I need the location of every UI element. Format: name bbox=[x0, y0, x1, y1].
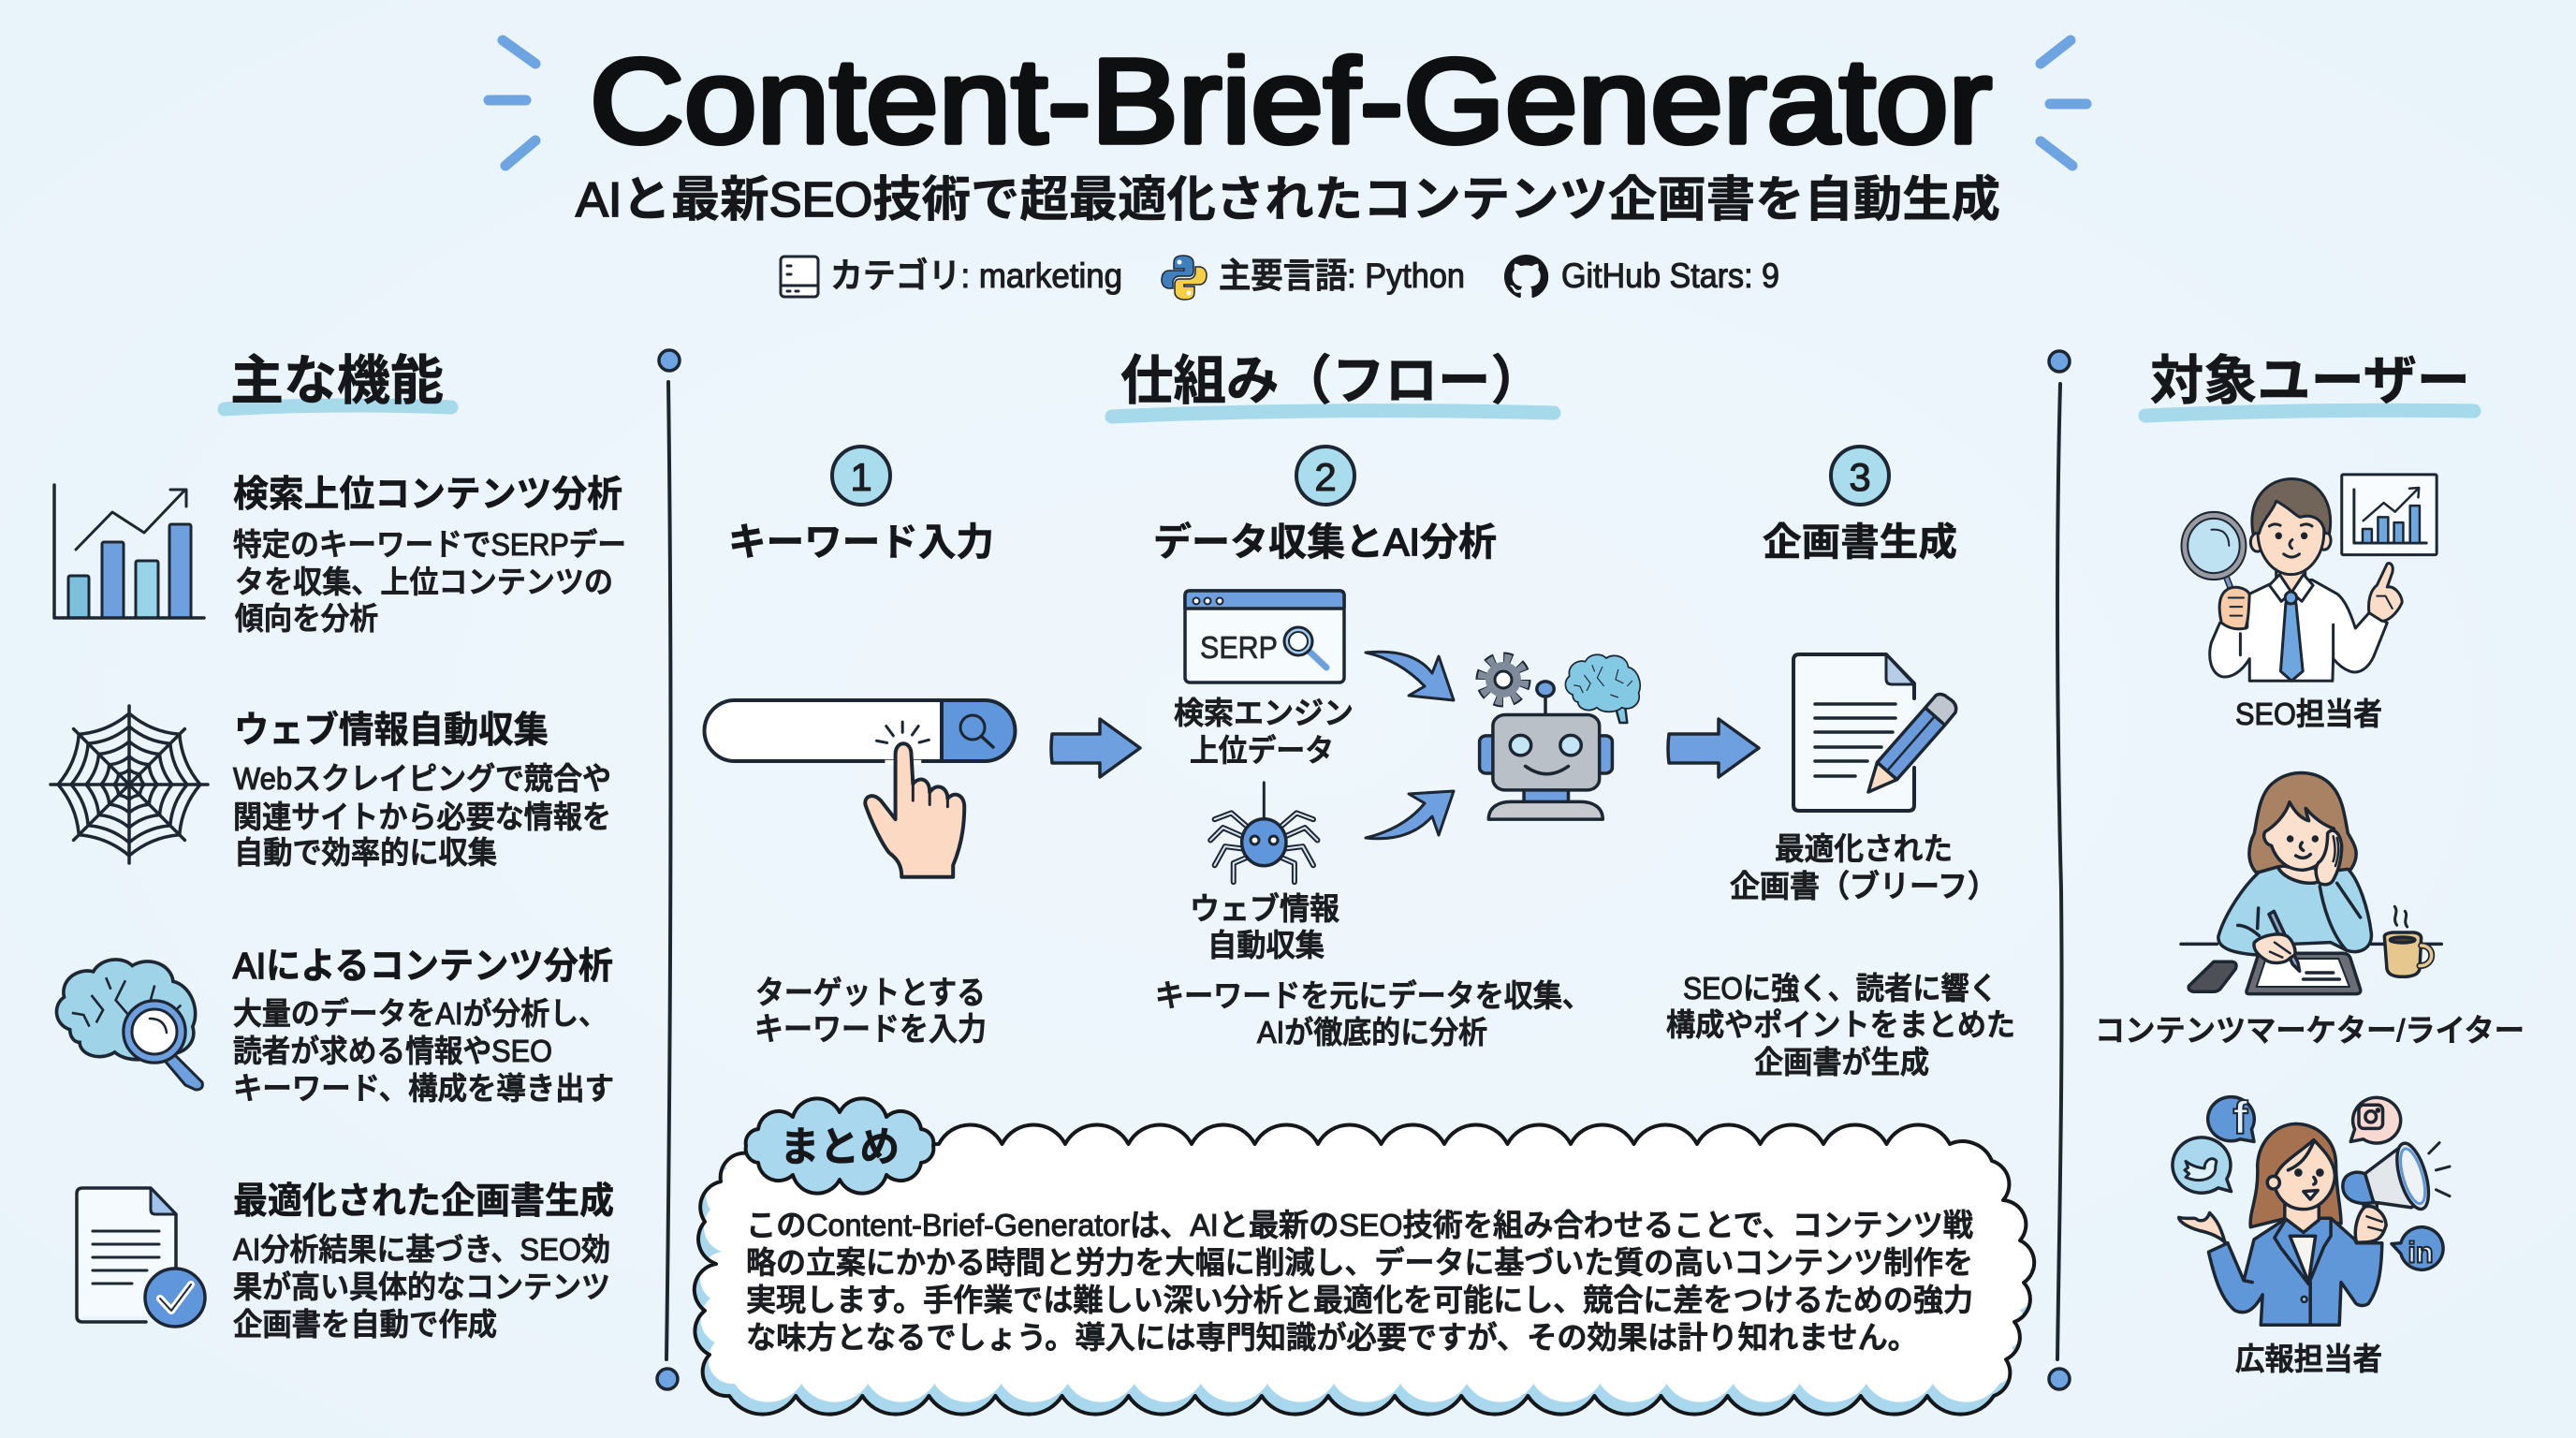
feature text bbox=[233, 527, 626, 636]
step 1 bbox=[704, 447, 1015, 1048]
icon: brain with magnifier bbox=[56, 960, 202, 1090]
step title: キーワード入力 bbox=[728, 521, 994, 564]
feature 4 bbox=[77, 1181, 614, 1342]
feature 1 bbox=[54, 475, 626, 636]
spider label: ウェブ情報 bbox=[1190, 891, 1339, 926]
icon: document with check bbox=[77, 1188, 205, 1327]
illustration: woman with megaphone and social icons bbox=[2173, 1093, 2450, 1325]
SERP label bbox=[1174, 696, 1354, 768]
stars label: GitHub Stars: 9 bbox=[1561, 257, 1779, 295]
step text: キーワードを入力 bbox=[754, 1012, 987, 1048]
user: PR person bbox=[2173, 1093, 2450, 1376]
panel: target users bbox=[2095, 475, 2525, 1376]
decoration: title sparks bbox=[489, 40, 2086, 166]
step number 2 bbox=[1296, 447, 1354, 505]
feature text: 関連サイトから必要な情報を bbox=[233, 800, 611, 834]
heading: features: 主な機能 bbox=[230, 351, 444, 411]
illustration: woman writing on tablet bbox=[2181, 773, 2441, 994]
document label bbox=[1730, 831, 1998, 903]
icon: robot bbox=[1480, 682, 1612, 819]
feature text: タを収集、上位コンテンツの bbox=[235, 565, 613, 599]
icon: document with pencil bbox=[1793, 654, 1956, 811]
feature text: 傾向を分析 bbox=[235, 601, 378, 636]
user: content marketer bbox=[2095, 773, 2525, 1048]
heading underline: users bbox=[2145, 410, 2474, 416]
icon: brain bbox=[1565, 654, 1640, 723]
step number 1 bbox=[832, 447, 890, 505]
summary text: このContent-Brief-Generatorは、AIと最新のSEO技術を組み合わせることで、コンテンツ戦 bbox=[746, 1208, 1973, 1242]
SERP label: 上位データ bbox=[1190, 733, 1334, 768]
heading underline: features bbox=[225, 405, 451, 409]
panel: flow bbox=[704, 447, 2015, 1079]
feature text: キーワード、構成を導き出す bbox=[233, 1071, 614, 1106]
icon: notebook bbox=[781, 257, 818, 297]
step text bbox=[1666, 971, 2015, 1079]
document label: 企画書（ブリーフ） bbox=[1730, 869, 1998, 903]
feature title: ウェブ情報自動収集 bbox=[234, 710, 549, 751]
step text: キーワードを元にデータを収集、 bbox=[1155, 978, 1591, 1013]
heading underline: flow bbox=[1112, 411, 1554, 417]
step 2 bbox=[1153, 447, 1640, 1049]
icon: SERP window bbox=[1185, 591, 1344, 682]
user label: コンテンツマーケター/ライター bbox=[2095, 1013, 2525, 1048]
feature text: 特定のキーワードでSERPデー bbox=[233, 527, 626, 562]
step 3 bbox=[1666, 447, 2015, 1079]
illustration: woman with megaphone and social icons: in bbox=[2408, 1236, 2434, 1269]
summary tag bbox=[746, 1098, 933, 1194]
feature text bbox=[233, 761, 611, 870]
divider: left bbox=[657, 350, 680, 1389]
category label: カテゴリ: marketing bbox=[830, 257, 1122, 295]
step text: SEOに強く、読者に響く bbox=[1683, 971, 1998, 1005]
step number 2: 2 bbox=[1314, 455, 1337, 499]
title: Content-Brief-Generator bbox=[590, 35, 1992, 169]
illustration: man with magnifier and chart bbox=[2182, 475, 2437, 681]
icon: spider bbox=[1210, 783, 1317, 882]
step text: AIが徹底的に分析 bbox=[1257, 1015, 1487, 1049]
SERP label: 検索エンジン bbox=[1174, 696, 1354, 730]
arrow: SERP to robot bbox=[1366, 652, 1454, 700]
summary text bbox=[746, 1208, 1973, 1355]
spider label bbox=[1190, 891, 1339, 962]
step title: データ収集とAI分析 bbox=[1153, 521, 1497, 564]
user label: SEO担当者 bbox=[2235, 697, 2382, 731]
feature text: 企画書を自動で作成 bbox=[233, 1307, 497, 1342]
icon: spider web bbox=[38, 694, 220, 875]
feature text: Webスクレイピングで競合や bbox=[233, 761, 611, 796]
panel: features bbox=[38, 475, 626, 1342]
illustration: woman with megaphone and social icons: f bbox=[2233, 1093, 2248, 1144]
summary cloud bbox=[695, 1112, 2040, 1415]
step number 3 bbox=[1831, 447, 1889, 505]
summary tag text: まとめ bbox=[780, 1124, 900, 1170]
feature text: 大量のデータをAIが分析し、 bbox=[233, 996, 607, 1031]
divider: right bbox=[2049, 351, 2070, 1389]
feature text: 読者が求める情報やSEO bbox=[233, 1034, 552, 1068]
user: SEO person bbox=[2182, 475, 2437, 731]
summary text: 略の立案にかかる時間と労力を大幅に削減し、データに基づいた質の高いコンテンツ制作を bbox=[746, 1245, 1973, 1280]
document label: 最適化された bbox=[1775, 831, 1953, 866]
step text: 構成やポイントをまとめた bbox=[1666, 1007, 2015, 1042]
icon: python bbox=[1162, 256, 1207, 300]
step text bbox=[1155, 978, 1591, 1049]
icon: pointing hand bbox=[865, 722, 964, 877]
feature text: 自動で効率的に収集 bbox=[234, 835, 497, 870]
subtitle: AIと最新SEO技術で超最適化されたコンテンツ企画書を自動生成 bbox=[576, 173, 2000, 227]
step title: 企画書生成 bbox=[1763, 521, 1957, 564]
arrow: step 2 to step 3 bbox=[1668, 719, 1759, 777]
icon: github bbox=[1504, 255, 1548, 298]
icon: search bar bbox=[704, 700, 1015, 761]
summary text: な味方となるでしょう。導入には専門知識が必要ですが、その効果は計り知れません。 bbox=[746, 1320, 1918, 1355]
meta row bbox=[781, 255, 1779, 300]
language label: 主要言語: Python bbox=[1219, 257, 1465, 295]
summary text: 実現します。手作業では難しい深い分析と最適化を可能にし、競合に差をつけるための強力 bbox=[746, 1283, 1973, 1317]
icon: bar chart bbox=[54, 485, 204, 618]
step number 3: 3 bbox=[1849, 455, 1871, 499]
arrow: step 1 to step 2 bbox=[1051, 719, 1140, 777]
feature text: AI分析結果に基づき、SEO効 bbox=[233, 1232, 610, 1267]
feature title: 最適化された企画書生成 bbox=[233, 1181, 614, 1222]
feature text: 果が高い具体的なコンテンツ bbox=[233, 1269, 610, 1304]
icon: gear bbox=[1482, 658, 1525, 701]
feature text bbox=[233, 1232, 610, 1342]
user label: 広報担当者 bbox=[2235, 1342, 2382, 1376]
step text: 企画書が生成 bbox=[1754, 1045, 1929, 1079]
panel: summary callout bbox=[695, 1098, 2040, 1415]
icon: SERP window: SERP bbox=[1200, 630, 1278, 665]
feature 2 bbox=[38, 694, 611, 875]
heading: flow: 仕組み（フロー） bbox=[1120, 351, 1544, 411]
step text: ターゲットとする bbox=[755, 976, 986, 1011]
step text bbox=[754, 976, 987, 1048]
feature 3 bbox=[56, 946, 614, 1106]
spider label: 自動収集 bbox=[1208, 928, 1325, 962]
feature title: 検索上位コンテンツ分析 bbox=[233, 475, 622, 515]
feature text bbox=[233, 996, 614, 1106]
step number 1: 1 bbox=[850, 455, 872, 499]
heading: users: 対象ユーザー bbox=[2150, 351, 2470, 411]
arrow: spider to robot bbox=[1366, 791, 1454, 839]
feature title: AIによるコンテンツ分析 bbox=[233, 946, 613, 987]
